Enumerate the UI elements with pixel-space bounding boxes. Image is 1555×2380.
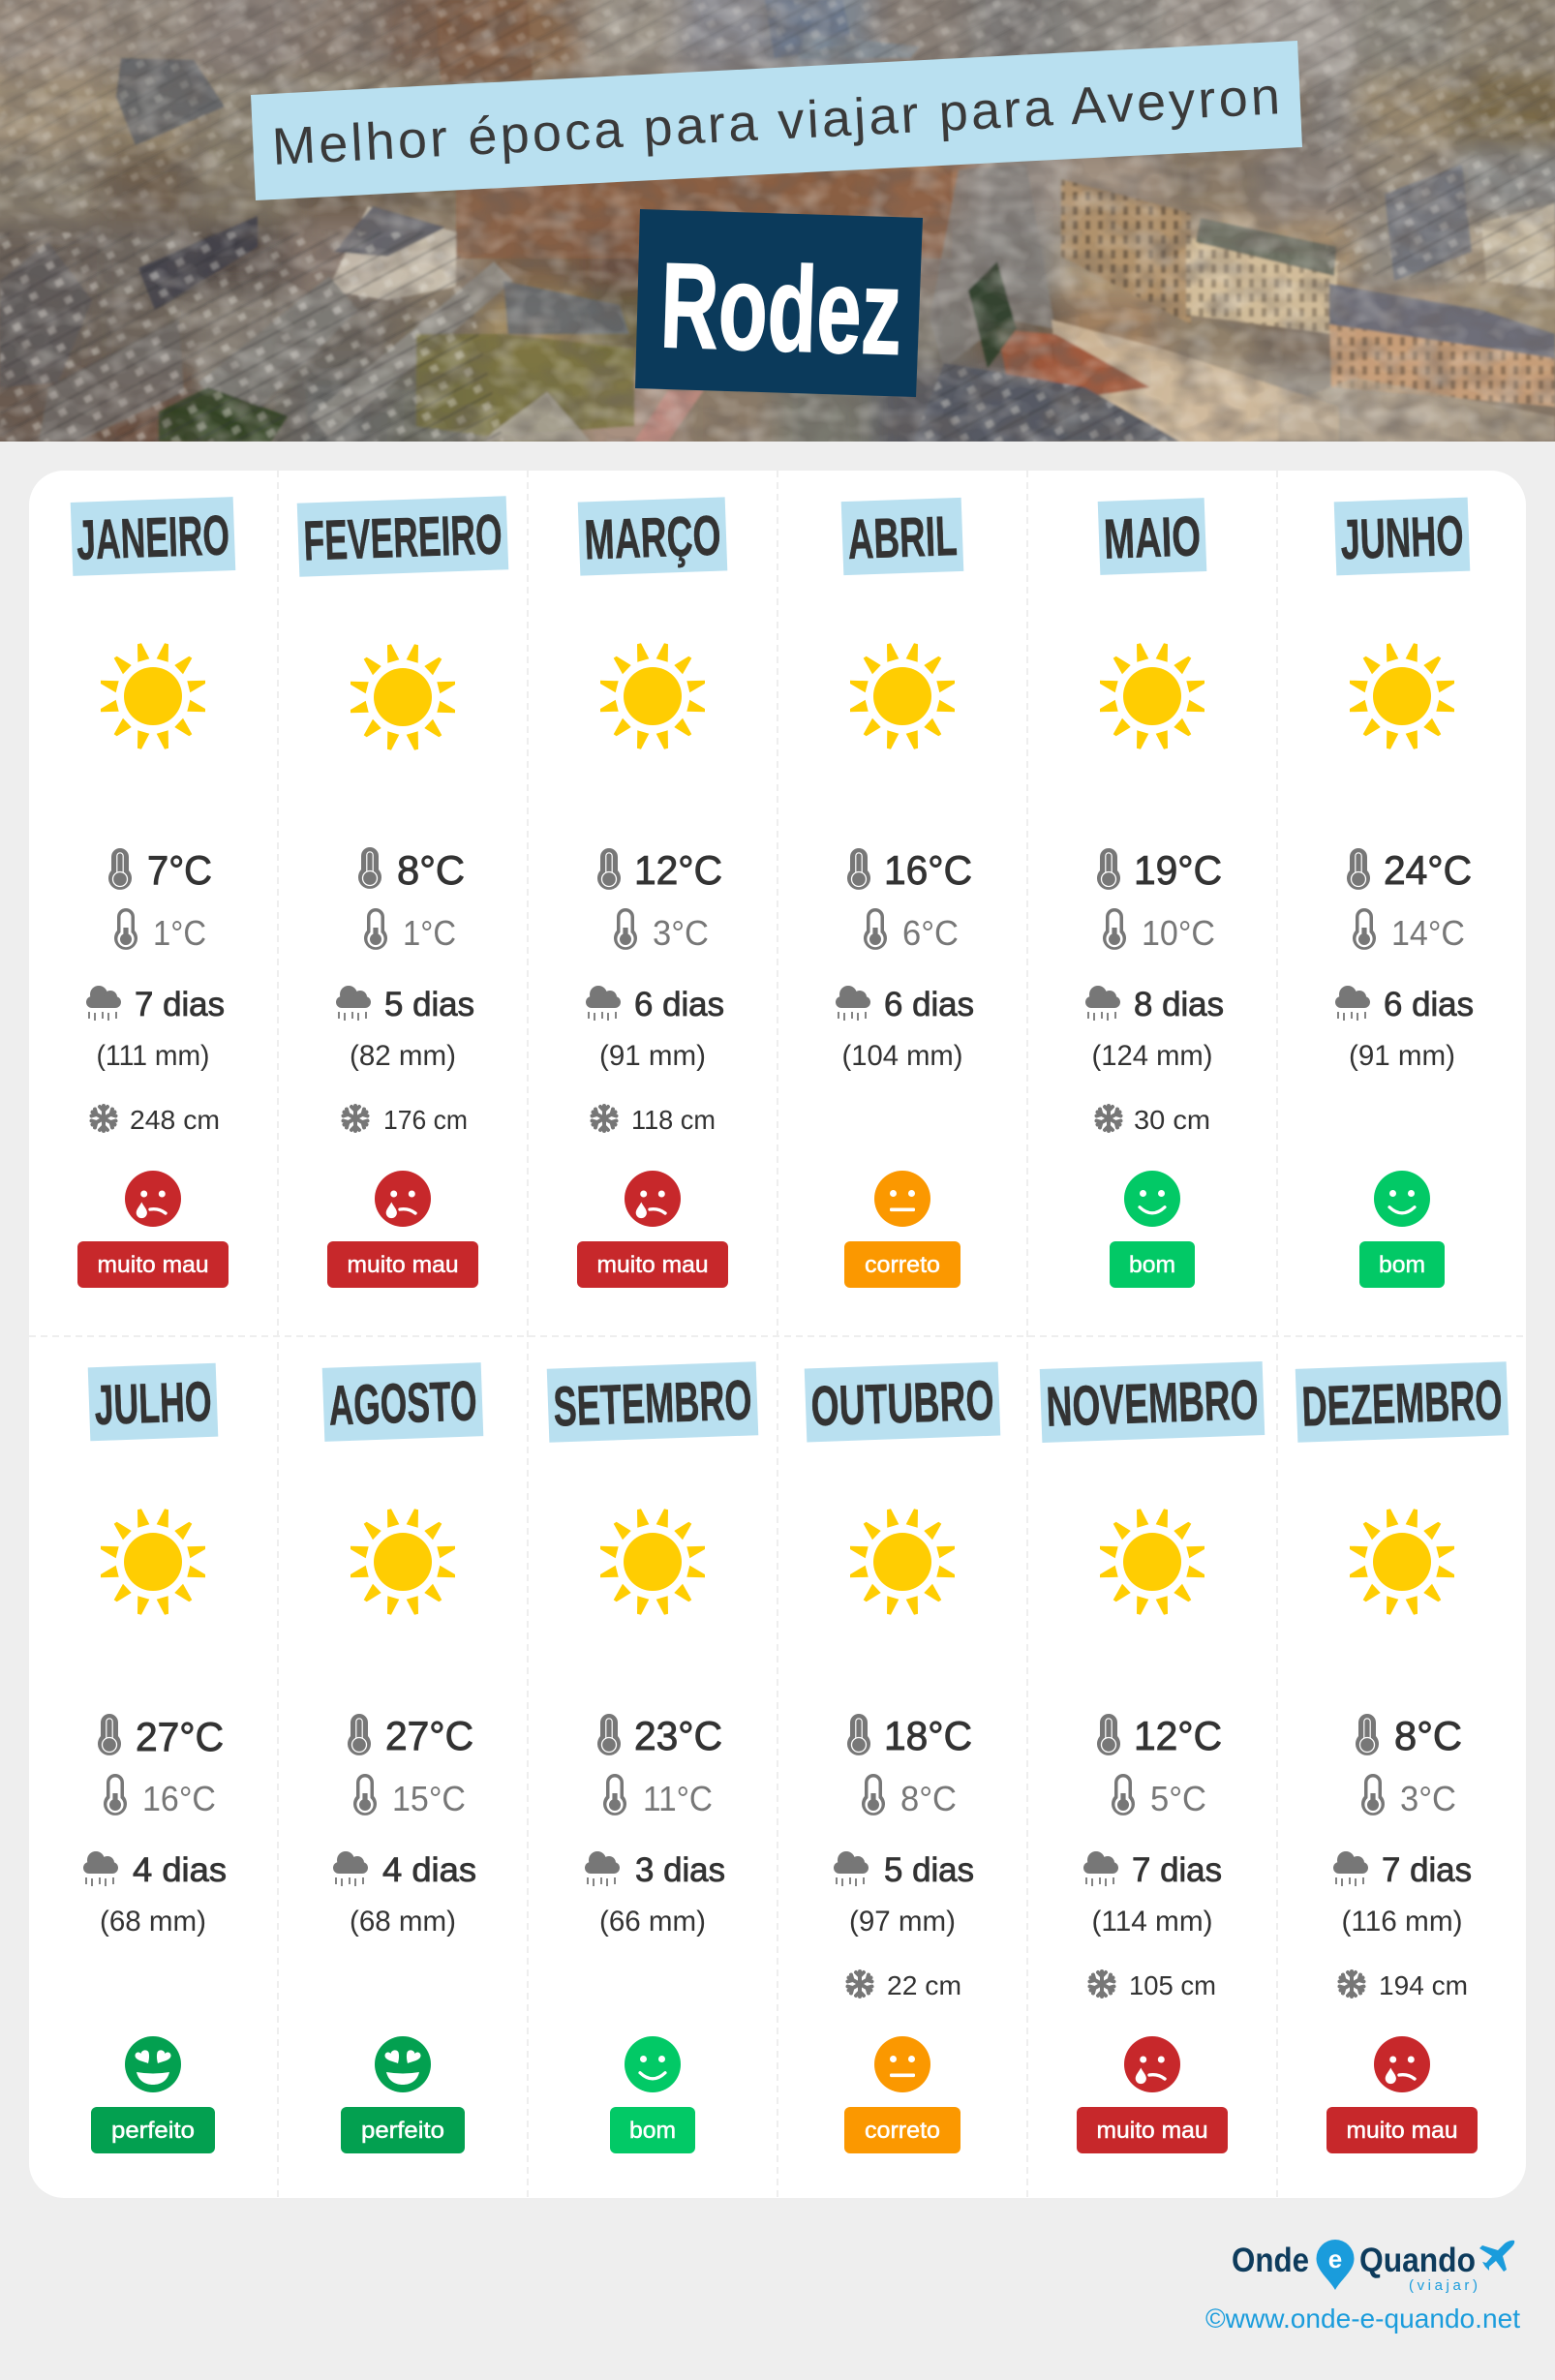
low temperature: 11°C [643,1779,713,1818]
rating badge: muito mau [1347,2118,1457,2144]
rating badge: muito mau [1097,2118,1207,2144]
month label: maio: MAIO [1103,504,1202,571]
icon: low temperature [1361,1774,1385,1816]
low temperature: 1°C [153,913,206,953]
icon: snow [343,1106,368,1131]
rainfall: (114 mm) [1092,1906,1212,1938]
rating badge [1326,2107,1478,2153]
logo: Onde e Quando: Quando [1359,2242,1476,2279]
icon: low temperature [864,908,887,950]
rating badge: correto [865,1252,940,1278]
icon: high temperature [597,1714,621,1755]
panel: março [577,497,728,1288]
icon: high temperature [1347,848,1370,890]
city name block: Rodez: Rodez [658,238,903,381]
panel: novembro [1040,1361,1265,2153]
high temperature: 16°C [884,847,972,893]
icon: very bad face [625,1171,681,1227]
icon: rain [586,986,621,1021]
rainy days: 6 dias [884,986,974,1023]
month label: fevereiro: FEVEREIRO [302,503,503,573]
icon: perfect face [125,2036,181,2092]
rating badge [1359,1241,1445,1288]
icon: sun [351,1509,455,1615]
high temperature: 18°C [884,1713,972,1758]
rainfall: (111 mm) [97,1040,209,1072]
high temperature: 24°C [1384,847,1472,893]
panel: julho [83,1363,227,2153]
icon: rain [333,1851,368,1886]
month label: novembro: NOVEMBRO [1045,1368,1260,1439]
icon: good face [1124,1171,1180,1227]
low temperature: 6°C [902,913,959,953]
rainfall: (68 mm) [350,1906,456,1938]
rating badge: bom [629,2118,676,2144]
icon: rain [336,986,371,1021]
icon: snow [91,1106,116,1131]
snowfall: 194 cm [1379,1970,1468,2000]
icon: low temperature [1103,908,1126,950]
icon: low temperature [364,908,387,950]
icon: very bad face [375,1171,431,1227]
icon: very bad face [1374,2036,1430,2092]
low temperature: 3°C [1400,1779,1456,1818]
icon: very bad face [125,1171,181,1227]
rating badge [341,2107,465,2153]
icon: snow [1090,1971,1113,1997]
website credit: ©www.onde-e-quando.net [1205,2304,1520,2334]
high temperature: 12°C [1134,1713,1222,1758]
panel: abril [836,498,974,1288]
icon: high temperature [597,848,621,890]
rating badge [610,2107,695,2153]
icon: neutral face [874,2036,930,2092]
icon: sun [1100,1509,1204,1615]
icon: good face [1374,1171,1430,1227]
icon: sun [850,1509,955,1615]
panel: junho [1334,498,1474,1288]
icon: rain [1083,1851,1118,1886]
month label: março: MARÇO [583,504,722,571]
rainfall: (91 mm) [1349,1040,1455,1072]
icon: good face [625,2036,681,2092]
low temperature: 3°C [653,913,709,953]
rainfall: (116 mm) [1342,1906,1462,1938]
icon: rain [834,1851,869,1886]
icon: snow [848,1971,871,1997]
rainfall: (124 mm) [1092,1040,1212,1072]
icon: perfect face [375,2036,431,2092]
rating badge [844,1241,960,1288]
logo: Onde e Quando [1232,2240,1514,2294]
month label: agosto: AGOSTO [327,1369,478,1438]
panel: dezembro [1296,1361,1509,2153]
rainfall: (91 mm) [599,1040,706,1072]
icon: sun [600,1509,705,1615]
snowfall: 118 cm [631,1105,716,1135]
icon: sun [351,644,455,750]
icon: rain [836,986,870,1021]
icon: high temperature [358,847,381,889]
rainfall: (68 mm) [100,1906,206,1938]
rating badge: muito mau [98,1252,208,1278]
month label: janeiro: JANEIRO [76,503,230,572]
icon: snow [1096,1106,1121,1131]
icon: snow [1340,1971,1363,1997]
rainfall: (104 mm) [842,1040,962,1072]
icon: high temperature [1097,848,1120,890]
snowfall: 30 cm [1134,1105,1210,1135]
icon: rain [585,1851,620,1886]
rating badge [577,1241,728,1288]
rainy days: 6 dias [634,986,724,1023]
low temperature: 16°C [142,1779,216,1818]
panel: monthly climate card [29,471,1526,2198]
header photo: aerial view of Rodez [0,0,1555,442]
month label: agosto [322,1362,483,1442]
month label: julho: JULHO [93,1370,213,1437]
low temperature: 5°C [1150,1779,1206,1818]
icon: high temperature [1356,1714,1379,1755]
rainy days: 7 dias [1132,1851,1222,1889]
rating badge [327,1241,478,1288]
month label: fevereiro [297,496,508,577]
panel: setembro [547,1361,758,2153]
rainy days: 3 dias [635,1851,725,1889]
icon: low temperature [862,1774,885,1816]
high temperature: 19°C [1134,847,1222,893]
high temperature: 23°C [634,1713,722,1758]
icon: high temperature [847,1714,870,1755]
icon: map pin [1317,2240,1354,2290]
panel: maio [1085,498,1224,1288]
icon: rain [1085,986,1120,1021]
icon: rain [86,986,121,1021]
rating badge: perfeito [111,2118,195,2144]
rating badge [1077,2107,1228,2153]
rating badge: muito mau [597,1252,708,1278]
high temperature: 8°C [397,847,465,893]
icon: high temperature [348,1714,371,1755]
logo subtitle: (viajar) [1409,2277,1478,2294]
icon: sun [1100,643,1204,749]
high temperature: 8°C [1394,1713,1462,1758]
month label: julho [88,1363,218,1441]
icon: neutral face [874,1171,930,1227]
rainy days: 7 dias [1382,1851,1472,1889]
icon: rain [83,1851,118,1886]
icon: sun [101,643,205,749]
panel: fevereiro [297,496,508,1288]
icon: high temperature [847,848,870,890]
rating badge [1110,1241,1195,1288]
city name block: Rodez [635,209,923,397]
rainfall: (66 mm) [599,1906,706,1938]
icon: sun [101,1509,205,1615]
icon: sun [1350,643,1454,749]
month label: janeiro [71,497,235,576]
icon: low temperature [614,908,637,950]
icon: rain [1333,1851,1368,1886]
month label: setembro: SETEMBRO [552,1368,753,1439]
icon: sun [850,643,955,749]
icon: low temperature [1353,908,1376,950]
icon: high temperature [1097,1714,1120,1755]
panel: janeiro [71,497,235,1288]
month label: novembro [1040,1361,1265,1443]
snowfall: 22 cm [887,1970,961,2000]
rating badge [77,1241,229,1288]
rating badge: bom [1129,1252,1175,1278]
low temperature: 15°C [392,1779,466,1818]
month label: março [578,497,727,576]
month label: junho [1334,498,1470,575]
icon: high temperature [98,1714,121,1755]
title banner: Melhor época para viajar para Aveyron [271,67,1281,176]
icon: low temperature [353,1774,377,1816]
high temperature: 12°C [634,847,722,893]
high temperature: 27°C [136,1714,224,1759]
rating badge: muito mau [348,1252,458,1278]
month label: abril: ABRIL [846,504,959,571]
rainy days: 5 dias [384,986,474,1023]
rainy days: 4 dias [382,1851,476,1889]
panel: outubro [805,1362,1000,2153]
icon: low temperature [603,1774,626,1816]
month label: setembro [547,1361,758,1443]
snowfall: 105 cm [1129,1970,1216,2000]
month label: abril [841,498,963,575]
rainfall: (97 mm) [849,1906,956,1938]
low temperature: 8°C [900,1779,957,1818]
icon: sun [1350,1509,1454,1615]
logo: Onde e Quando: Onde [1232,2242,1309,2279]
rainfall: (82 mm) [350,1040,456,1072]
low temperature: 1°C [403,913,456,953]
icon: low temperature [1112,1774,1135,1816]
title banner [251,41,1302,200]
icon: plane [1479,2241,1514,2272]
high temperature: 7°C [147,847,212,893]
rainy days: 6 dias [1384,986,1474,1023]
rating badge: bom [1379,1252,1425,1278]
rainy days: 4 dias [133,1851,227,1889]
high temperature: 27°C [385,1713,473,1758]
rating badge [844,2107,960,2153]
month label: junho: JUNHO [1339,504,1465,571]
rainy days: 5 dias [884,1851,974,1889]
low temperature: 10°C [1142,913,1215,953]
rating badge [91,2107,215,2153]
icon: map pin: e [1328,2244,1342,2273]
month label: outubro [805,1362,1000,1442]
low temperature: 14°C [1391,913,1465,953]
icon: sun [600,643,705,749]
month label: outubro: OUTUBRO [809,1369,995,1438]
icon: very bad face [1124,2036,1180,2092]
rating badge: correto [865,2118,940,2144]
icon: low temperature [114,908,137,950]
snowfall: 176 cm [383,1105,468,1135]
rainy days: 8 dias [1134,986,1224,1023]
rainy days: 7 dias [135,986,225,1023]
icon: snow [593,1106,616,1131]
icon: high temperature [108,848,132,890]
month label: maio [1098,498,1206,575]
icon: rain [1335,986,1370,1021]
snowfall: 248 cm [130,1105,220,1135]
icon: low temperature [104,1774,127,1816]
panel: agosto [322,1362,483,2153]
rating badge: perfeito [361,2118,444,2144]
